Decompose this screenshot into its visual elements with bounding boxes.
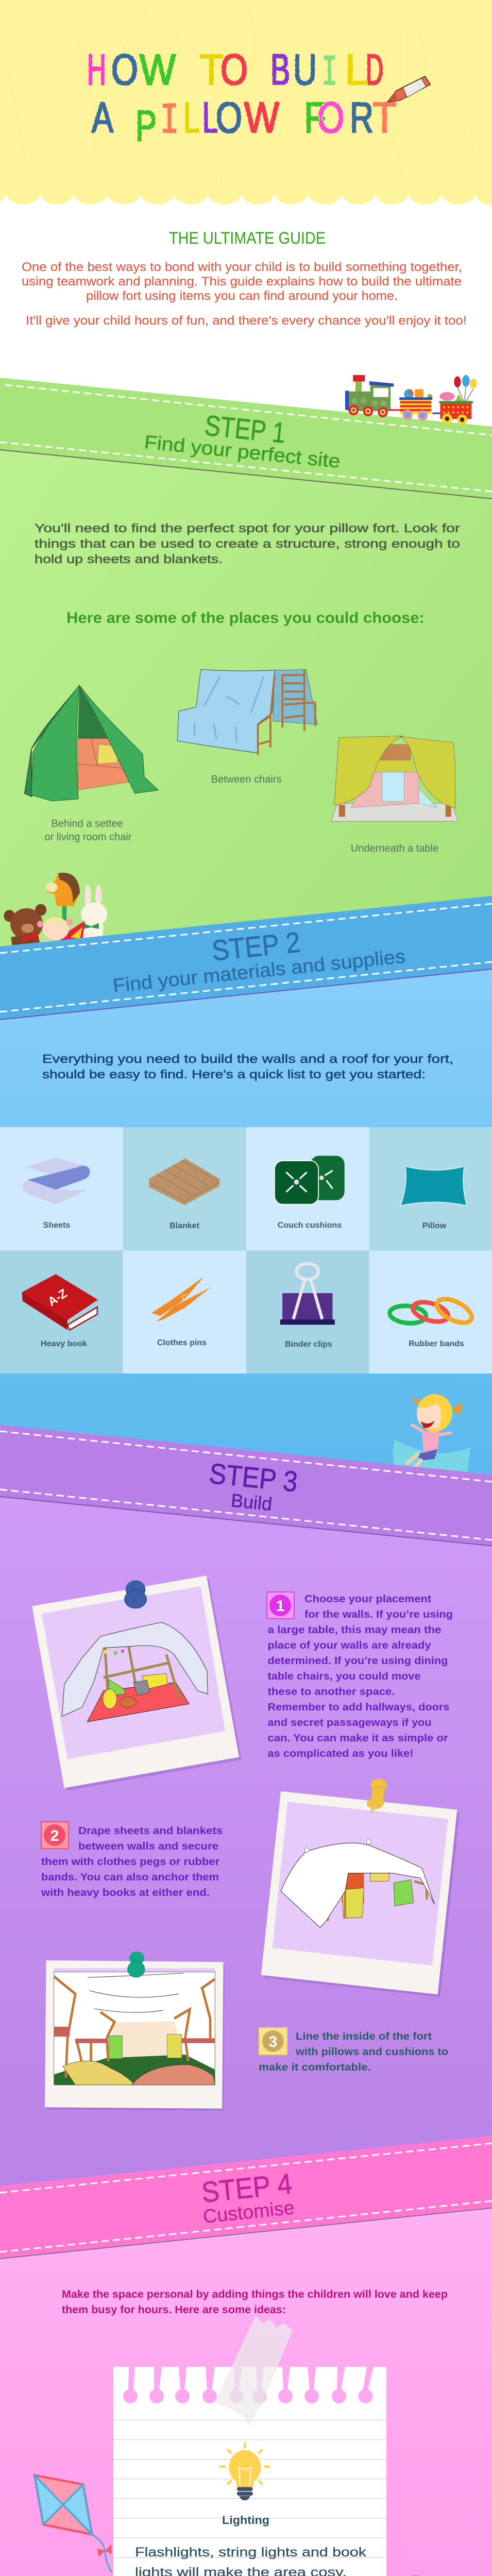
title: H <box>87 45 106 94</box>
text block: build step 1: can. You can make it as simple or <box>268 1733 448 1744</box>
heading: the ultimate guide: THE ULTIMATE GUIDE <box>169 229 326 247</box>
text: step 1 paragraph: things that can be used to create a structure, strong enough to <box>35 537 460 550</box>
text block: build step 3: with pillows and cushions to <box>295 2046 448 2058</box>
panel: supplies grid <box>0 1127 492 1374</box>
supply labels: Binder clips <box>285 1340 332 1349</box>
panel: header <box>0 0 492 205</box>
label: lighting: Lighting <box>222 2514 269 2527</box>
title: I <box>321 49 337 98</box>
title: L <box>183 93 199 142</box>
text: step 2 paragraph: Everything you need to build the walls and a roof for your fort, <box>42 1052 453 1065</box>
text: step 1 paragraph <box>35 521 460 566</box>
badge: number 1: 1 <box>276 1598 284 1615</box>
icon: blue pin <box>125 1580 146 1608</box>
title: D <box>366 45 383 94</box>
title: L <box>345 45 369 94</box>
illustration: between chairs <box>177 669 317 755</box>
panel: step 3 background <box>0 1425 492 2267</box>
icon: toy train <box>345 375 477 425</box>
caption: behind a settee: Behind a settee <box>52 818 123 829</box>
title: U <box>293 45 317 94</box>
icon: couch cushions <box>275 1156 345 1205</box>
text block: build step 1: determined. If you’re using dining <box>268 1655 448 1667</box>
icon: kite <box>35 2475 112 2572</box>
text block: build step 2 <box>41 1822 223 1899</box>
title: T <box>199 45 224 94</box>
icon: blanket <box>149 1158 219 1205</box>
icon: girl on pillow <box>393 1394 471 1472</box>
text block: build step 1: a large table, this may mean the <box>268 1624 441 1636</box>
text block: build step 2: with heavy books at either end. <box>41 1887 210 1899</box>
badge: number 2 <box>41 1822 69 1849</box>
text block: build step 2: between walls and secure <box>78 1841 218 1852</box>
title: F <box>304 93 326 142</box>
title: A <box>92 93 113 142</box>
text block: build step 1: Remember to add hallways, doors <box>268 1702 449 1713</box>
intro text: pillow fort using items you can find around your home. <box>86 289 398 303</box>
supply labels: Blanket <box>169 1222 200 1230</box>
supply labels: Heavy book <box>41 1340 87 1348</box>
icon: clothes pin <box>151 1277 211 1322</box>
panel: intro <box>22 229 467 328</box>
text block: build step 3: make it comfortable. <box>259 2062 371 2073</box>
panel: notepad <box>113 2316 387 2576</box>
icon: toy friends <box>4 873 107 948</box>
text: step 4 intro: them busy for hours. Here are some ideas: <box>62 2304 286 2316</box>
text block: build step 1: as complicated as you like! <box>268 1748 413 1759</box>
icon: binder clip <box>280 1264 335 1325</box>
intro text <box>22 260 467 328</box>
caption: between chairs: Between chairs <box>211 774 281 785</box>
badge: number 2: 2 <box>50 1827 59 1844</box>
supply icons <box>22 1156 475 1330</box>
title <box>87 45 397 150</box>
text: step 2 paragraph <box>42 1052 453 1081</box>
text: lighting <box>135 2545 367 2576</box>
heading: places you could choose: Here are some of the places you could choose: <box>66 609 425 626</box>
panel: step 1 background <box>0 378 492 1030</box>
icon: crayon <box>387 76 431 102</box>
title: O <box>317 93 344 142</box>
illustration: sheet over settee <box>25 685 159 801</box>
supply labels: Sheets <box>43 1221 70 1230</box>
text block: build step 2: them with clothes pegs or rubber <box>41 1856 219 1868</box>
subheading: find your perfect site: Find your perfect site <box>143 431 341 472</box>
title: O <box>220 45 248 94</box>
photo 1: fort with lights <box>32 1575 242 1791</box>
subheading: find your materials and supplies: Find your materials and supplies <box>112 945 406 996</box>
heading: step 1: STEP 1 <box>203 409 287 449</box>
title: T <box>372 93 397 142</box>
panel: step 1 banner <box>0 378 492 499</box>
text block: build step 2: bands. You can also anchor them <box>41 1872 219 1883</box>
text: step 1 paragraph: hold up sheets and blankets. <box>35 552 223 566</box>
text block: build step 3: Line the inside of the fort <box>296 2031 432 2042</box>
text: step 4 intro: Make the space personal by adding things the children will love and keep <box>62 2289 448 2300</box>
supply labels: Pillow <box>422 1222 447 1230</box>
supply labels: Rubber bands <box>409 1340 464 1348</box>
title: O <box>216 93 242 142</box>
photo 2: sheet fort with clips <box>261 1791 460 1997</box>
text: lighting: Flashlights, string lights and book <box>135 2545 367 2560</box>
icon: sheets <box>23 1158 90 1205</box>
supply labels <box>41 1221 464 1349</box>
subheading: build: Build <box>230 1489 273 1515</box>
text: step 1 paragraph: You'll need to find the perfect spot for your pillow fort. Look for <box>35 521 460 535</box>
text block: build step 1: place of your walls are already <box>268 1640 431 1651</box>
icon: light bulb <box>219 2443 270 2500</box>
title: B <box>270 45 290 94</box>
icon: yellow pin <box>367 1779 387 1815</box>
heading: step 3: STEP 3 <box>208 1457 299 1498</box>
text: step 4 intro <box>62 2289 448 2316</box>
badge: number 1 <box>267 1592 294 1619</box>
text block: build step 1: Choose your placement <box>304 1594 431 1605</box>
intro text: It'll give your child hours of fun, and there's every chance you'll enjoy it too! <box>26 314 467 328</box>
subheading: customise: Customise <box>202 2197 295 2227</box>
panel: step 2 banner <box>0 896 492 1020</box>
intro text: One of the best ways to bond with your child is to build something together, <box>22 260 462 274</box>
title: W <box>244 93 279 142</box>
title: P <box>135 101 157 150</box>
text block: build step 1: table chairs, you could move <box>268 1671 420 1682</box>
illustration: underneath a table <box>331 736 458 821</box>
text: step 2 paragraph: should be easy to find. Here's a quick list to get you started: <box>42 1067 426 1081</box>
text block: build step 1: for the walls. If you’re using <box>304 1609 453 1620</box>
badge: number 3 <box>259 2028 287 2055</box>
yellow scalloped background <box>0 0 492 205</box>
title: W <box>140 45 176 94</box>
text block: build step 2: Drape sheets and blankets <box>78 1825 223 1837</box>
panel: step 4 banner <box>0 2136 492 2259</box>
tape <box>214 2316 293 2427</box>
icon: heavy book <box>22 1274 98 1330</box>
icon: heavy book: A-Z <box>46 1286 70 1309</box>
text block: build step 1: and secret passageways if you <box>268 1717 432 1728</box>
heading: step 4: STEP 4 <box>200 2167 294 2209</box>
panel: step 2 background <box>0 896 492 1494</box>
title: L <box>202 93 218 142</box>
icon: pillow <box>400 1166 467 1206</box>
panel: step 3 banner <box>0 1425 492 1546</box>
supply labels: Couch cushions <box>278 1221 342 1230</box>
title: I <box>160 97 179 146</box>
text block: build step 3 <box>259 2028 448 2073</box>
caption: behind a settee: or living room chair <box>45 832 132 843</box>
panel: step 4 background <box>0 2136 492 2576</box>
supply labels: Clothes pins <box>157 1338 207 1347</box>
title: O <box>111 45 138 94</box>
icon: green pin <box>128 1952 145 1977</box>
caption: behind a settee <box>45 818 132 843</box>
icon: toy duck <box>388 2575 446 2576</box>
photo 3: inside the fort <box>45 1960 225 2111</box>
title: R <box>350 93 374 142</box>
icon: rubber bands <box>389 1294 475 1328</box>
heading: step 2: STEP 2 <box>210 926 302 967</box>
caption: underneath a table: Underneath a table <box>351 843 438 854</box>
badge: number 3: 3 <box>269 2033 277 2050</box>
intro text: using teamwork and planning. This guide explains how to build the ultimate <box>22 275 462 289</box>
text block: build step 1: these to another space. <box>268 1686 395 1698</box>
text block: build step 1 <box>267 1592 453 1759</box>
